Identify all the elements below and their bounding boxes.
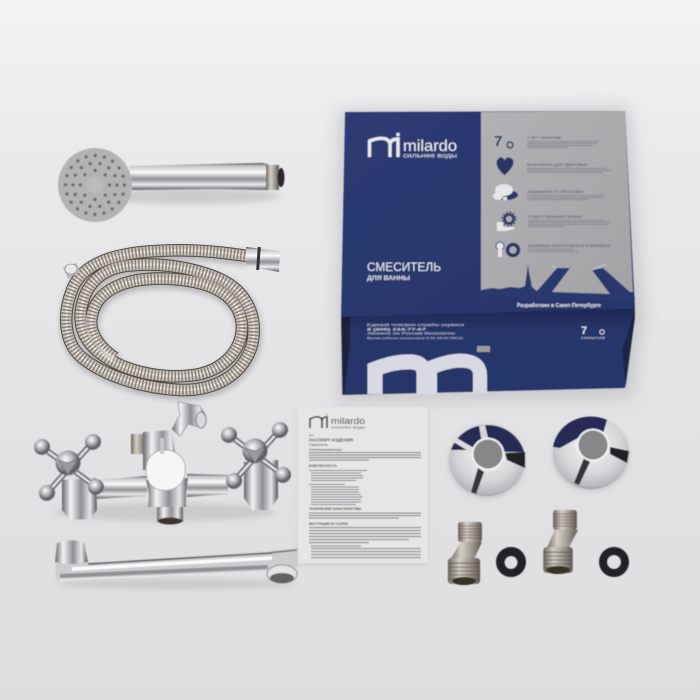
leaflet title: ПАСПОРТ ИЗДЕЛИЯ <box>309 438 353 442</box>
warranty badge: 7 <box>581 325 587 337</box>
feature: safe for health: БЕЗОПАСНО ДЛЯ ЗДОРОВЬЯ <box>527 163 587 167</box>
right fitting <box>543 510 578 574</box>
panel: product box <box>338 106 644 402</box>
diverter arm <box>131 430 178 470</box>
feature: shower accessories <box>496 242 612 257</box>
service hotline <box>367 323 464 340</box>
right escutcheon <box>553 416 629 491</box>
grey info panel <box>481 111 633 295</box>
leaflet title: Арт. <box>309 433 314 437</box>
leaflet section headings: ТЕХНИЧЕСКИЕ ХАРАКТЕРИСТИКИ <box>309 507 362 511</box>
threaded end <box>266 165 284 190</box>
shower face <box>58 148 132 222</box>
box front side <box>341 308 635 395</box>
box lid <box>341 111 635 317</box>
tagline: сильнее воды <box>403 152 458 160</box>
panel: escutcheon plates <box>449 416 629 498</box>
logo mark <box>370 133 398 157</box>
Saint Petersburg skyline <box>481 264 635 300</box>
milardo logo <box>370 133 458 160</box>
panel: flexible hose <box>63 247 280 393</box>
feature: warranty <box>494 133 599 150</box>
leaflet section headings <box>309 448 362 526</box>
aerator <box>267 565 297 583</box>
left cross handle <box>34 434 104 501</box>
right washer <box>599 547 629 577</box>
leaflet logo: milardo <box>331 416 365 426</box>
panel: shower head <box>58 148 284 222</box>
service hotline: Единый телефон службы сервиса <box>367 323 464 327</box>
left washer <box>496 547 526 577</box>
product name <box>367 262 441 282</box>
left escutcheon <box>449 424 525 498</box>
panel: mixer body with cross handles <box>34 402 291 524</box>
panel: swivel spout <box>55 540 298 589</box>
feature: responsible service: ОТВЕТСТВЕННЫЙ СЕРВИС <box>528 215 582 219</box>
shower holder <box>172 402 206 436</box>
leaflet title <box>309 433 353 447</box>
leaflet logo: сильнее воды <box>331 426 365 430</box>
product name: СМЕСИТЕЛЬ <box>367 262 441 274</box>
icon: accessories <box>496 242 518 257</box>
leaflet section headings: ИНСТРУКЦИЯ ПО СБОРКЕ <box>309 522 348 526</box>
service hotline: Звоните по России бесплатно <box>367 332 455 336</box>
left fitting <box>448 522 482 585</box>
spout pipe <box>55 548 298 581</box>
feature: shower accessories: ДУШЕВЫЕ АКСЕССУАРЫ В КОМПЛЕКТЕ <box>528 244 612 248</box>
product name: ДЛЯ ВАННЫ <box>367 276 410 282</box>
warranty badge <box>581 325 605 340</box>
right cross handle <box>221 422 291 489</box>
icon: gear and hand <box>497 212 516 231</box>
large m logo <box>375 346 490 394</box>
leaflet section headings: Техническая документация <box>309 448 342 452</box>
hose end nut <box>63 263 80 279</box>
icon: cloud <box>493 184 518 200</box>
left base <box>62 478 97 520</box>
service hotline: 8 (800) 234-77-67 <box>367 328 426 332</box>
feature: responsible service <box>497 212 610 231</box>
feature: safe for health <box>497 157 611 175</box>
service hotline: Время работы операторов 9:30-18:00 (МСК) <box>367 336 463 340</box>
feature: warranty: 7 ЛЕТ ГАРАНТИИ <box>527 136 562 140</box>
leaflet section headings: КОМПЛЕКТНОСТЬ <box>309 464 338 468</box>
hose connector <box>246 247 280 272</box>
feature: leak protection <box>493 184 605 200</box>
right base <box>244 460 278 510</box>
made in Saint Petersburg: Разработано в Санкт-Петербурге <box>517 302 601 309</box>
panel: eccentric fittings and washers <box>448 510 629 585</box>
icon: warranty seven: 7 <box>494 133 502 150</box>
shower handle <box>129 163 268 190</box>
warranty badge: ГАРАНТИЯ <box>581 336 605 340</box>
right pipe <box>187 474 228 497</box>
leaflet title: Смеситель <box>309 443 328 447</box>
spout swivel collar <box>55 540 88 564</box>
brand name: milardo <box>403 138 457 155</box>
icon: heart <box>497 157 513 175</box>
leaflet logo <box>310 414 365 430</box>
feature: leak protection: ЗАЩИЩЕНО ОТ ПРОТЕЧКИ <box>527 190 583 194</box>
panel: instruction leaflet <box>298 407 428 565</box>
centre body <box>146 438 188 524</box>
left pipe <box>95 476 147 499</box>
